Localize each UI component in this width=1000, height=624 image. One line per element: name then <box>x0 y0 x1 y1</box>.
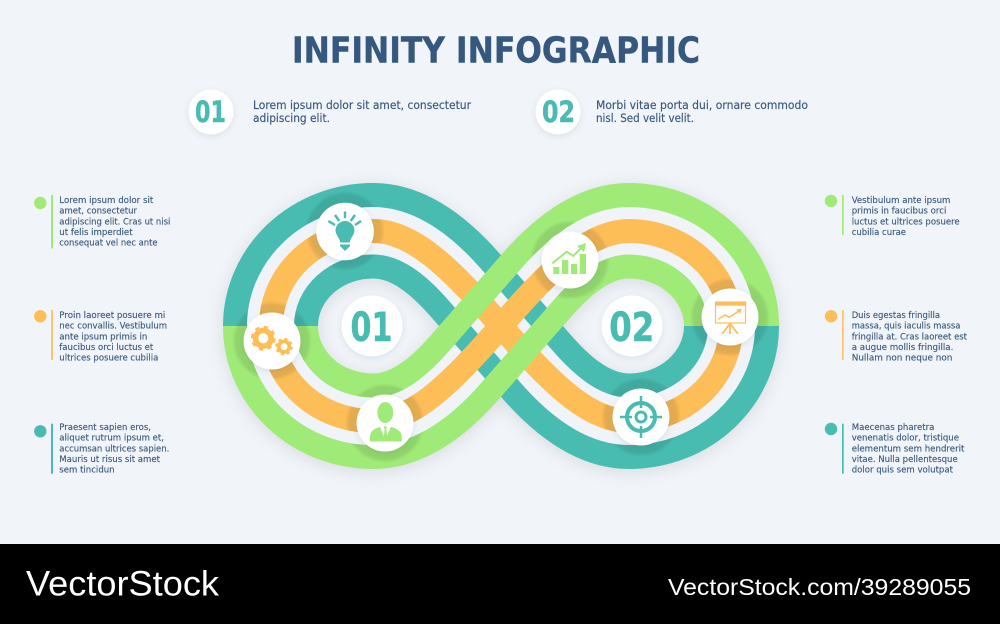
left note 3: accumsan ultrices sapien. <box>59 443 169 454</box>
right note 2: Nullam non neque non <box>852 353 953 364</box>
icon: growth chart <box>542 232 598 288</box>
right note 3: Maecenas pharetra <box>852 422 934 433</box>
right note 3: venenatis dolor, tristique <box>852 433 959 444</box>
right note 1: Vestibulum ante ipsum <box>852 195 950 206</box>
center badge 01: 01 <box>350 305 392 351</box>
header item 01 <box>188 90 471 134</box>
footer url: VectorStock.com/39289055 <box>668 574 971 600</box>
right note 2: massa, quis iaculis massa <box>852 321 960 332</box>
left note 3: sem tincidun <box>59 465 115 476</box>
footer logo: VectorStock <box>26 564 220 604</box>
orange strand <box>271 231 731 421</box>
green strands <box>235 195 767 457</box>
right note 3: elementum sem hendrerit <box>852 443 965 454</box>
left note 2: Proin laoreet posuere mi <box>59 310 165 321</box>
left note 2: ante ipsum primis in <box>59 331 147 342</box>
left note 1: amet, consectetur <box>59 206 137 217</box>
icon: gears <box>244 312 300 370</box>
left note 1: Lorem ipsum dolor sit <box>59 195 154 206</box>
header text 02: nisl. Sed velit velit. <box>596 111 694 125</box>
left note 1 <box>34 195 170 249</box>
header item 02 <box>536 90 808 134</box>
right note 3 <box>825 422 965 476</box>
left note 3 <box>34 422 169 476</box>
left note 1: adipiscing elit. Cras ut nisi <box>59 216 170 227</box>
right note 3: vitae. Nulla pellentesque <box>852 454 958 465</box>
icon: light bulb <box>316 203 374 260</box>
right note 2: fringilla at. Cras laoreet est <box>852 331 967 342</box>
header badge 01 <box>188 90 234 134</box>
header text 02 <box>596 98 808 125</box>
left note 1: consequat vel nec ante <box>59 238 158 249</box>
header text 01 <box>253 98 471 125</box>
right note 2 <box>825 310 967 364</box>
header badge 02: 02 <box>542 95 575 129</box>
right note 2: a augue mollis fringilla. <box>852 342 953 353</box>
header badge 02 <box>536 90 580 134</box>
right note 1 <box>825 195 960 238</box>
header text 01: Lorem ipsum dolor sit amet, consectetur <box>253 98 471 112</box>
header text 02: Morbi vitae porta dui, ornare commodo <box>596 98 808 112</box>
left note 3: Praesent sapien eros, <box>59 422 151 433</box>
center badge 02: 02 <box>609 305 654 351</box>
right note 1: luctus et ultrices posuere <box>852 216 960 227</box>
icon halos <box>235 195 767 457</box>
center badge 02 <box>602 296 662 356</box>
infinity diagram <box>235 195 767 460</box>
header badge 01: 01 <box>195 95 226 129</box>
teal strands <box>235 195 767 457</box>
footer bar <box>0 544 1000 624</box>
left note 1: ut felis imperdiet <box>59 227 133 238</box>
left note 2: faucibus orci luctus et <box>59 342 154 353</box>
right note 1: primis in faucibus orci <box>852 206 946 217</box>
icon: presentation board <box>702 288 758 346</box>
left note 2: nec convallis. Vestibulum <box>59 321 167 332</box>
icon: businessman <box>356 394 414 452</box>
left note 3: Mauris ut risus sit amet <box>59 454 160 465</box>
header text 01: adipiscing elit. <box>253 111 330 125</box>
left note 2 <box>34 310 167 364</box>
right note 3: dolor quis sem volutpat <box>852 465 953 476</box>
title: INFINITY INFOGRAPHIC <box>292 30 700 72</box>
left note 2: ultrices posuere cubilia <box>59 353 158 364</box>
clean gaps between strands <box>271 231 731 421</box>
icon: target <box>612 388 670 446</box>
right note 2: Duis egestas fringilla <box>852 310 940 321</box>
left note 3: aliquet rutrum ipsum et, <box>59 433 164 444</box>
center badge 01 <box>342 296 402 356</box>
right note 1: cubilia curae <box>852 227 906 238</box>
soft shadow <box>235 198 767 460</box>
